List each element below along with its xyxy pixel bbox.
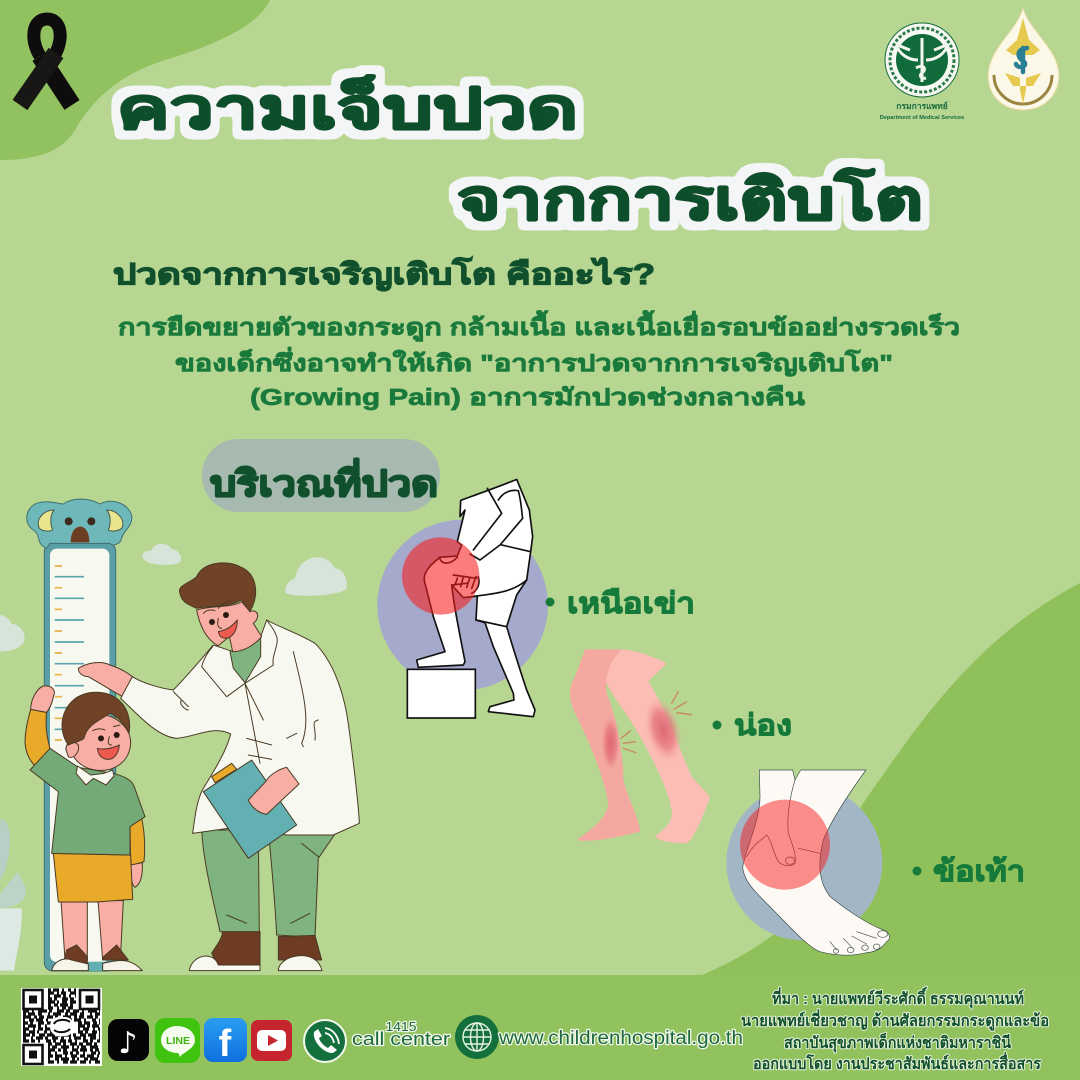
icon: globe bbox=[455, 1015, 499, 1059]
icon: Facebook: f bbox=[219, 1023, 232, 1065]
logo: Ministry of Public Health seal bbox=[880, 23, 964, 121]
QR code bbox=[21, 988, 102, 1066]
source credits: สถาบันสุขภาพเด็กแห่งชาติมหาราชินี bbox=[784, 1031, 1011, 1053]
icon: phone bbox=[304, 1020, 346, 1062]
label: calf: น่อง bbox=[734, 710, 792, 742]
hotline text: 1415 bbox=[386, 1019, 416, 1034]
source credits: ออกแบบโดย งานประชาสัมพันธ์และการสื่อสาร bbox=[753, 1052, 1041, 1073]
label: calf bbox=[712, 710, 792, 742]
illustration: knee pain figure bbox=[377, 479, 548, 718]
label: ankle: ข้อเท้า bbox=[933, 856, 1025, 888]
text block: definition bbox=[118, 310, 960, 410]
source credits bbox=[741, 987, 1049, 1073]
illustration: sore calves bbox=[570, 649, 710, 843]
footer band bbox=[0, 975, 1080, 1080]
subheading: what is growing pain: ปวดจากการเจริญเติบโต คืออะไร? bbox=[113, 256, 655, 292]
icon: black mourning ribbon bbox=[20, 19, 72, 105]
heading pill: pain areas bbox=[202, 439, 440, 512]
department name in English: Department of Medical Services bbox=[880, 115, 964, 121]
text block: definition: ของเด็กซึ่งอาจทำให้เกิด "อาการปวดจากการเจริญเติบโต" bbox=[175, 346, 893, 377]
illustration: doctor bbox=[78, 563, 359, 971]
illustration: clouds and plant bbox=[0, 544, 347, 971]
illustration: boy being measured bbox=[25, 686, 145, 971]
hotline text bbox=[352, 1019, 450, 1049]
illustration: koala height chart bbox=[27, 499, 132, 971]
source credits: ที่มา : นายแพทย์วีระศักดิ์ ธรรมคุณานนท์ bbox=[772, 987, 1024, 1009]
background blob: bottom right bbox=[690, 583, 1080, 980]
title line 2: จากการเติบโต bbox=[457, 167, 923, 231]
heading pill: pain areas: บริเวณที่ปวด bbox=[210, 458, 438, 504]
icon: LINE bbox=[155, 1018, 200, 1063]
logo: hospital teardrop emblem bbox=[988, 8, 1059, 110]
label: above the knee: เหนือเข่า bbox=[567, 588, 695, 620]
icon: LINE: LINE bbox=[166, 1035, 190, 1047]
hotline text: call center bbox=[352, 1029, 450, 1049]
icon: TikTok bbox=[108, 1019, 149, 1061]
title line 1: ความเจ็บปวด bbox=[117, 74, 578, 140]
icon: YouTube bbox=[251, 1020, 292, 1061]
website address: www.childrenhospital.go.th bbox=[498, 1028, 743, 1049]
illustration: ankle pain foot bbox=[726, 770, 889, 955]
background blob: top left bbox=[0, 0, 270, 160]
icon: TikTok: ♪ bbox=[118, 1026, 138, 1061]
source credits: นายแพทย์เชี่ยวชาญ ด้านศัลยกรรมกระดูกและข้อ bbox=[741, 1009, 1049, 1032]
department name: กรมการแพทย์ bbox=[896, 101, 948, 111]
title bbox=[117, 74, 923, 231]
text block: definition: (Growing Pain) อาการมักปวดช่วงกลางคืน bbox=[250, 384, 805, 410]
icon: Facebook bbox=[204, 1018, 247, 1065]
text block: definition: การยืดขยายตัวของกระดูก กล้ามเนื้อ และเนื้อเยื่อรอบข้ออย่างรวดเร็ว bbox=[118, 310, 960, 342]
